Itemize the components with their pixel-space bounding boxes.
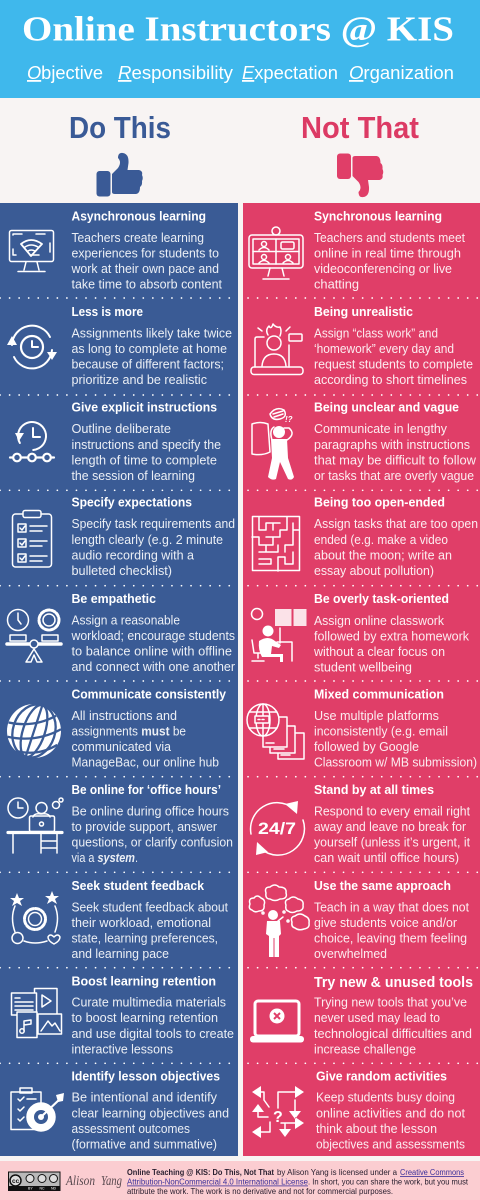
icon: 24/7 cycle <box>251 801 304 855</box>
item: be empathetic <box>7 591 236 674</box>
body text <box>314 708 477 770</box>
item: boost learning retention <box>12 973 234 1056</box>
body text: via a system. <box>72 850 138 865</box>
body text <box>72 516 235 578</box>
heading: Being too open-ended <box>314 495 445 510</box>
license text: by Alison Yang is licensed under a <box>277 1168 398 1177</box>
body text <box>72 708 219 770</box>
heading: Identify lesson objectives <box>72 1068 220 1083</box>
body text: work at their own pace and <box>71 261 219 276</box>
heading: Give random activities <box>316 1068 447 1083</box>
body text: instructions and specify the <box>72 437 221 452</box>
title: Online Instructors @ KIS <box>22 10 454 48</box>
signature: Alison <box>65 1174 95 1189</box>
icon: scattered arrows and question mark: ? <box>273 1109 283 1126</box>
body text: and learning pace <box>72 946 169 961</box>
ORE O subtitle row <box>27 63 454 83</box>
body text: away and leave no break for <box>314 819 467 834</box>
license text: Creative Commons <box>400 1168 464 1177</box>
body text: because of different factors; <box>72 356 224 372</box>
body text: objectives and assessments <box>316 1136 465 1152</box>
body text: Assign a reasonable <box>72 613 180 628</box>
icon: balance scale with clock and gear <box>7 610 61 662</box>
signature: Yang <box>101 1174 122 1189</box>
icon: creative commons badge: NC <box>40 1187 45 1191</box>
item: being unclear and vague <box>252 400 477 483</box>
body text <box>72 804 233 865</box>
body text <box>71 230 222 292</box>
license text: attribute the work. The work is no derivative and not for commercial purposes. <box>127 1187 393 1196</box>
icon: person at desk with clock <box>8 798 63 853</box>
body text: choice, leaving them feeling <box>314 930 467 946</box>
item: be overly task-oriented <box>252 591 469 674</box>
body text: ManageBac, our online hub <box>72 754 219 770</box>
body text <box>314 804 470 865</box>
icon: thumbs down <box>337 154 383 197</box>
ORE O subtitle row: Objective <box>27 63 103 83</box>
body text: Keep students busy doing <box>316 1090 455 1105</box>
body text: bulleted checklist) <box>72 563 172 578</box>
icon: globe <box>6 699 64 763</box>
body text: followed by Google <box>314 739 419 754</box>
license text: Online Teaching @ KIS: Do This, Not That <box>127 1168 274 1177</box>
item: asynchronous learning <box>10 209 222 292</box>
icon: checklist and target <box>11 1088 64 1131</box>
body text: as long to complete at home <box>72 341 227 356</box>
body text <box>314 516 478 578</box>
heading: Try new & unused tools <box>314 975 473 991</box>
body text: request students to complete <box>314 356 473 372</box>
body text: ‘homework” every day and <box>314 341 454 356</box>
license text <box>127 1168 469 1196</box>
heading: Use the same approach <box>314 878 451 893</box>
heading: Be empathetic <box>72 591 156 606</box>
signature <box>65 1174 122 1189</box>
body text: inconsistently (e.g. email <box>314 724 448 738</box>
ORE O subtitle row: Expectation <box>242 63 338 83</box>
license text: Attribution-NonCommercial 4.0 International License <box>127 1178 309 1186</box>
icon: thumbs up <box>96 153 143 196</box>
body text: experiences for students to <box>72 246 219 261</box>
item: communicate consistently <box>6 686 227 770</box>
icon: creative commons badge <box>8 1172 60 1191</box>
heading: Boost learning retention <box>72 973 216 988</box>
heading: Specify expectations <box>72 495 192 510</box>
footer license bar <box>0 1161 480 1200</box>
body text: increase challenge <box>314 1042 416 1056</box>
body text: to provide support, answer <box>72 819 218 834</box>
body text <box>314 995 472 1056</box>
body text: student wellbeing <box>314 660 412 674</box>
body text: Respond to every email right <box>314 804 470 819</box>
icon: creative commons badge: ND <box>51 1187 57 1191</box>
icon: creative commons badge: cc <box>12 1178 20 1185</box>
body text: online in real time through <box>314 246 461 261</box>
header banner <box>0 0 480 98</box>
body text: Curate multimedia materials <box>72 995 226 1010</box>
body text: length clearly (e.g. 2 minute <box>72 532 223 547</box>
heading: Mixed communication <box>314 686 444 701</box>
item: less is more <box>7 304 232 387</box>
item: identify lesson objectives <box>11 1068 229 1152</box>
icon: thinking person with clouds <box>249 885 309 957</box>
panel: do this column <box>0 203 238 1156</box>
icon: 24/7 cycle: 24/7 <box>258 820 296 838</box>
icon: worker at desk with charts <box>252 608 306 662</box>
body text <box>71 613 236 674</box>
body text <box>72 995 234 1056</box>
body text <box>314 326 473 387</box>
body text: Teachers create learning <box>72 230 204 245</box>
body text <box>72 326 232 387</box>
icon: maze <box>252 516 300 571</box>
body text: ended (e.g. make a video <box>314 532 448 547</box>
heading: Stand by at all times <box>314 782 434 797</box>
item: use the same approach <box>249 878 469 961</box>
item: seek student feedback <box>10 878 228 961</box>
panel: not that column <box>243 203 480 1156</box>
body text <box>314 421 477 483</box>
heading: Not That: Not That <box>301 110 419 145</box>
body text: assignments must be <box>72 724 186 738</box>
body text: technological difficulties and <box>314 1026 472 1041</box>
heading: Being unclear and vague <box>314 400 459 415</box>
icon: monitor with wifi <box>10 230 54 272</box>
heading: Communicate consistently <box>72 686 227 701</box>
body text: Be intentional and identify <box>72 1090 217 1105</box>
body text: Trying new tools that you’ve <box>314 995 467 1010</box>
body text: never used may lead to <box>314 1010 440 1025</box>
body text: essay about pollution) <box>314 563 434 578</box>
item: try new and unused tools <box>250 975 473 1056</box>
body text: Teachers and students meet <box>314 230 465 245</box>
body text: and connect with one another <box>72 659 236 674</box>
body text: workload; encourage students <box>71 628 235 643</box>
body text: to balance online with offline <box>72 644 232 658</box>
icon: creative commons badge: BY <box>28 1187 33 1191</box>
body text: Communicate in lengthy <box>314 421 447 436</box>
body text: Be online during office hours <box>72 804 229 819</box>
item: being too open-ended <box>252 495 478 578</box>
body text: Assign “class work” and <box>314 326 438 340</box>
body text: clear learning objectives and <box>72 1106 229 1120</box>
body text: online activities and do not <box>316 1106 465 1120</box>
icon: feedback gear with emoji and heart <box>10 891 60 944</box>
icon: scattered arrows and question mark <box>252 1086 304 1138</box>
body text: Outline deliberate <box>72 421 171 436</box>
icon: video conference screen <box>249 227 303 279</box>
body text: according to short timelines <box>314 372 467 387</box>
body text: Specify task requirements and <box>72 516 235 531</box>
heading: Less is more <box>72 304 143 319</box>
icon: globe and stacked windows <box>247 704 304 759</box>
item: being unrealistic <box>251 304 473 387</box>
body text: take time to absorb content <box>72 277 222 292</box>
heading: Synchronous learning <box>314 209 442 224</box>
body text: that may be difficult to follow <box>314 452 477 468</box>
body text: followed by extra homework <box>314 628 469 644</box>
ORE O subtitle row: Organization <box>349 63 454 83</box>
heading: Give explicit instructions <box>72 400 217 415</box>
body text: paragraphs with instructions <box>314 437 470 452</box>
body text: think about the lesson <box>316 1121 437 1136</box>
icon: multimedia windows <box>12 988 62 1038</box>
body text: interactive lessons <box>72 1042 173 1056</box>
body text: Assignments likely take twice <box>72 326 232 340</box>
item: give random activities <box>252 1068 465 1152</box>
heading: Do This: Do This <box>69 110 171 145</box>
body text: assessment outcomes <box>72 1121 190 1136</box>
icon: clock in cycle arrows <box>7 326 57 368</box>
body text: All instructions and <box>72 708 177 723</box>
body text <box>72 899 228 961</box>
icon: clock with timeline <box>10 417 54 461</box>
body text: prioritize and be realistic <box>72 372 207 387</box>
body text: Use multiple platforms <box>314 708 439 723</box>
body text: and use digital tools to create <box>72 1026 234 1041</box>
body text: overwhelmed <box>314 946 387 961</box>
heading: Seek student feedback <box>72 878 205 893</box>
icon: checklist clipboard <box>12 510 52 567</box>
body text: length of time to complete <box>72 452 217 468</box>
body text: yourself (unless it’s urgent, it <box>314 835 470 850</box>
body text: the session of learning <box>72 468 195 483</box>
body text <box>313 613 469 674</box>
body text: questions, or clarify confusion <box>72 835 233 850</box>
icon: confused person with scribble <box>252 409 294 480</box>
body text: to boost learning retention <box>72 1010 218 1025</box>
body text <box>316 1090 465 1152</box>
body text: Seek student feedback about <box>72 899 228 914</box>
body text: without a clear focus on <box>313 644 445 659</box>
ORE O subtitle row: Responsibility <box>118 63 233 83</box>
body text <box>72 1090 229 1152</box>
body text <box>314 899 469 961</box>
body text <box>314 230 465 292</box>
icon: laptop with error <box>250 1001 304 1042</box>
body text: chatting <box>314 277 359 292</box>
body text: about the moon; write an <box>314 548 452 562</box>
body text: (formative and summative) <box>72 1136 217 1152</box>
body text: communicated via <box>72 739 172 754</box>
icon: confused person with scribble: !? <box>285 415 293 424</box>
body text: their workload, emotional <box>72 915 211 930</box>
heading: Be online for ‘office hours’ <box>72 782 221 797</box>
body text <box>72 421 221 483</box>
item: give explicit instructions <box>10 400 221 483</box>
item: be online for office hours <box>8 782 233 865</box>
item: specify expectations <box>12 495 235 578</box>
body text: Teach in a way that does not <box>314 899 469 914</box>
body text: state, learning preferences, <box>72 930 218 946</box>
item: stand by at all times <box>251 782 470 865</box>
body text: or tasks that are overly vague <box>314 468 474 483</box>
item: synchronous learning <box>249 209 465 292</box>
body text: can wait until office hours) <box>314 850 459 865</box>
icon: stressed person on laptop <box>251 324 303 374</box>
body text: Assign online classwork <box>314 613 444 628</box>
heading: Be overly task-oriented <box>314 591 449 606</box>
body text: audio recording with a <box>72 548 195 562</box>
license text: . In short, you can share the work, but you must <box>308 1178 469 1186</box>
item: mixed communication <box>247 686 477 770</box>
body text: give students voice and/or <box>314 915 458 930</box>
body text: videoconferencing or live <box>314 261 452 276</box>
heading: Asynchronous learning <box>72 209 206 224</box>
heading: Being unrealistic <box>314 304 413 319</box>
